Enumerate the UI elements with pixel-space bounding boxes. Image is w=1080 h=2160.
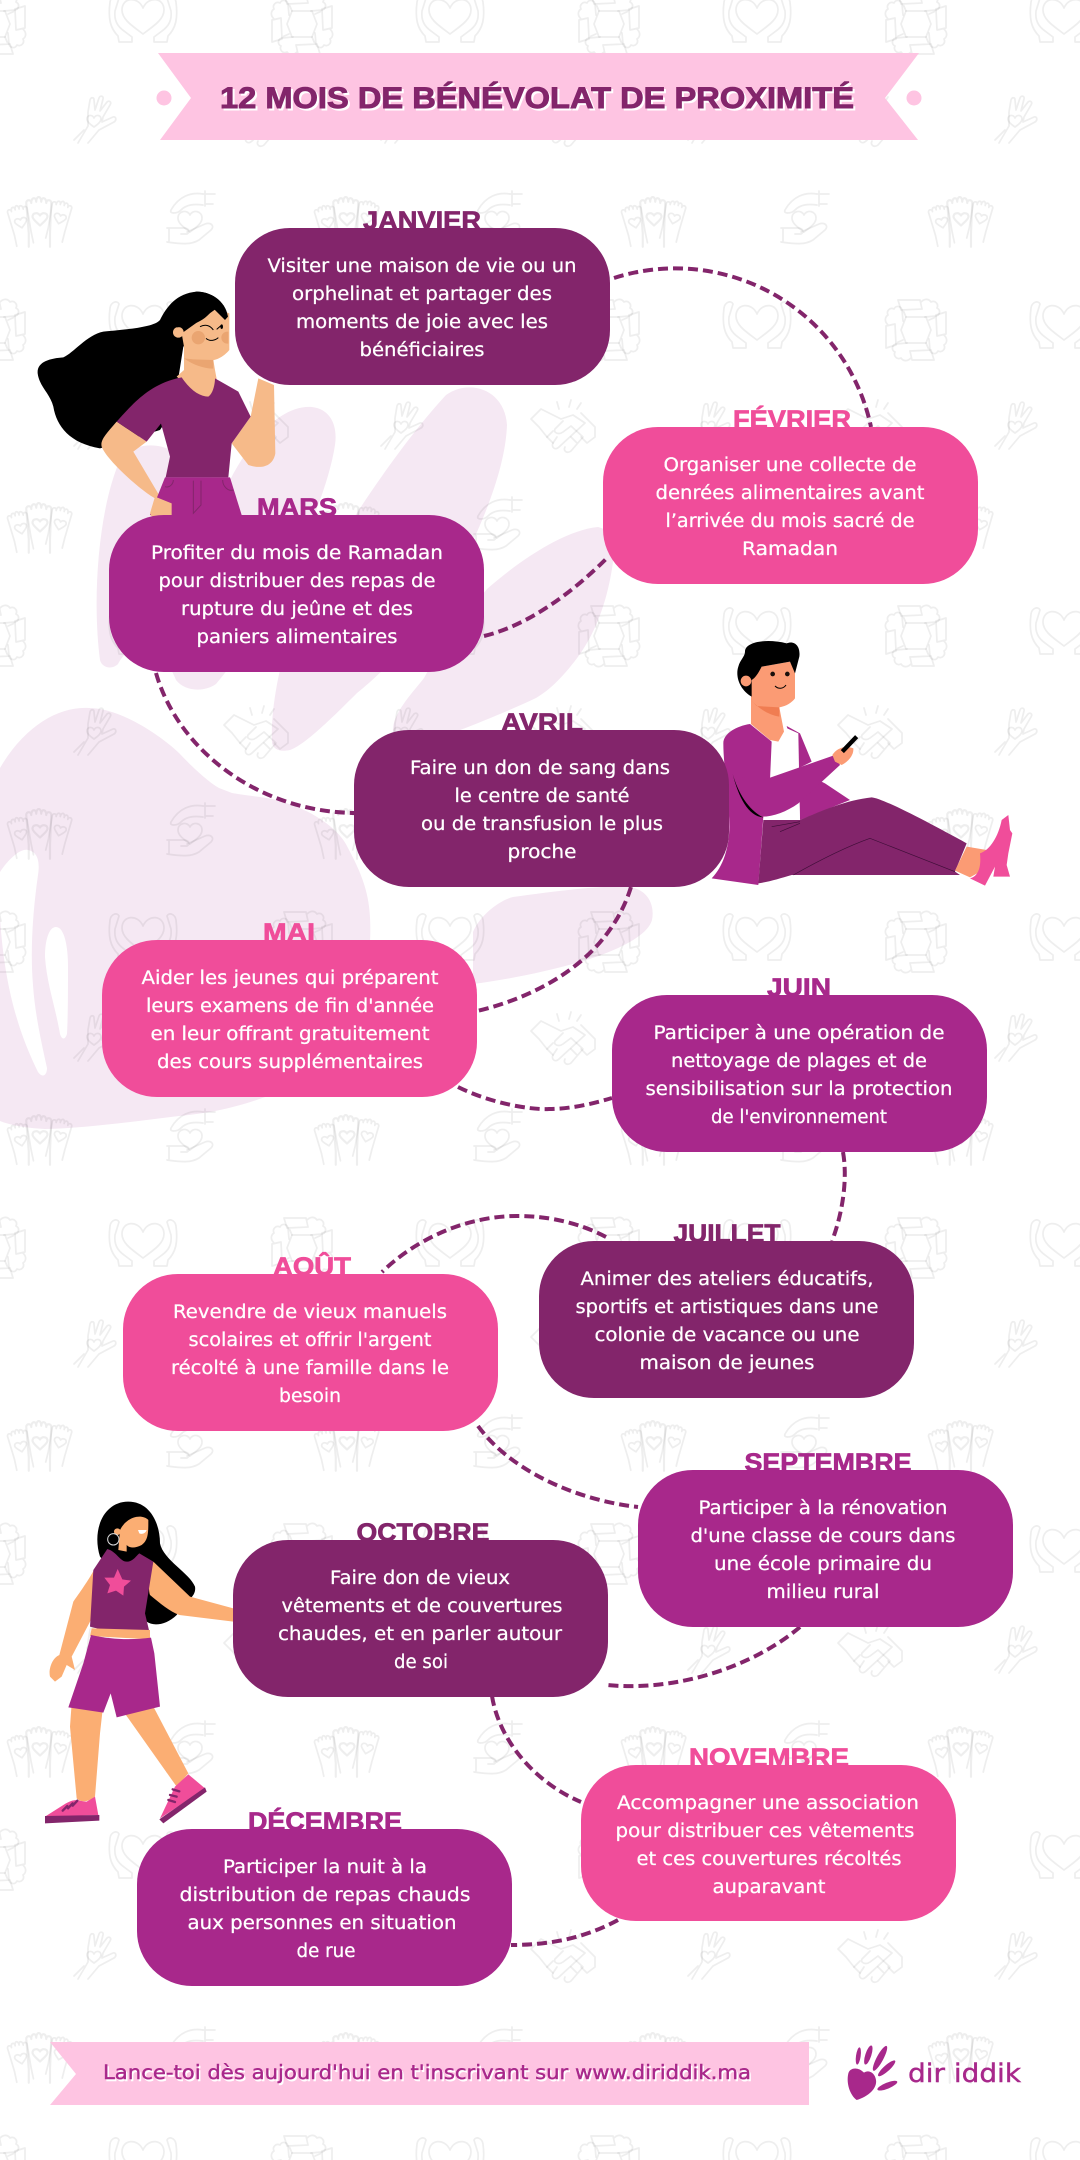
panel: novembre: auparavant	[712, 1877, 826, 1898]
figure: walking woman in shorts	[45, 1502, 233, 1823]
panel: septembre	[638, 1449, 1013, 1627]
connector: juin to juillet	[832, 1152, 845, 1241]
connector: janvier to février	[614, 268, 871, 427]
large pale hand shape	[0, 387, 653, 1129]
logo: dir iddik	[848, 2044, 1021, 2100]
panel: février: denrées alimentaires avant	[656, 483, 924, 504]
panel: mars: MARS	[257, 494, 337, 522]
connector: février to mars	[484, 558, 607, 636]
panel: février: FÉVRIER	[733, 405, 851, 434]
panel: janvier: bénéficiaires	[360, 340, 484, 361]
panel: janvier: Visiter une maison de vie ou un	[268, 256, 576, 277]
footer call-to-action banner: Lance-toi dès aujourd'hui en t'inscrivant sur www.diriddik.ma	[104, 2063, 752, 2086]
panel: mars	[109, 494, 484, 672]
panel: février: Ramadan	[742, 539, 838, 560]
panel: mai: Aider les jeunes qui préparent	[142, 968, 438, 989]
panel: juillet: sportifs et artistiques dans une	[576, 1297, 878, 1318]
panel: décembre: distribution de repas chauds	[180, 1885, 470, 1906]
panel: octobre: Faire don de vieux	[330, 1568, 510, 1589]
logo: dir iddik: dir iddik	[908, 2059, 1021, 2089]
figure: woman with long hair	[38, 292, 275, 525]
panel: juillet: JUILLET	[674, 1220, 780, 1248]
panel: janvier: moments de joie avec les	[296, 312, 548, 333]
panel: août: besoin	[279, 1386, 341, 1407]
panel: juin: sensibilisation sur la protection	[646, 1079, 952, 1100]
panel: juin: de l'environnement	[711, 1107, 887, 1128]
panel: septembre: une école primaire du	[714, 1554, 932, 1575]
panel: avril: AVRIL	[501, 709, 583, 737]
panel: février	[603, 405, 978, 584]
panel: août: AOÛT	[273, 1251, 351, 1281]
panel: novembre: et ces couvertures récoltés	[636, 1849, 902, 1870]
panel: janvier	[235, 207, 610, 385]
figure: seated man with phone	[712, 641, 1012, 886]
connector: mars to avril	[156, 673, 355, 813]
panel: septembre: d'une classe de cours dans	[690, 1526, 956, 1547]
panel: mars: paniers alimentaires	[196, 627, 398, 648]
panel: avril	[354, 709, 729, 887]
panel: juin: JUIN	[767, 974, 831, 1002]
panel: août	[123, 1251, 498, 1431]
panel: septembre: milieu rural	[766, 1582, 880, 1603]
panel: décembre: Participer la nuit à la	[223, 1857, 427, 1878]
panel: janvier: orphelinat et partager des	[292, 284, 552, 305]
footer call-to-action banner	[50, 2042, 809, 2105]
connector: mai to juin	[458, 1087, 612, 1109]
panel: juillet: Animer des ateliers éducatifs,	[580, 1269, 874, 1290]
panel: novembre: pour distribuer ces vêtements	[616, 1821, 914, 1842]
panel: juillet	[539, 1220, 914, 1398]
panel: avril: le centre de santé	[454, 786, 630, 807]
panel: décembre: DÉCEMBRE	[248, 1807, 402, 1836]
connector: juillet to août	[382, 1216, 606, 1272]
panel: mai: leurs examens de fin d'année	[146, 996, 434, 1017]
panel: juillet: colonie de vacance ou une	[594, 1325, 860, 1346]
connector: août to septembre	[478, 1426, 638, 1507]
title banner	[156, 53, 922, 140]
panel: août: scolaires et offrir l'argent	[188, 1330, 432, 1351]
panel: mai: des cours supplémentaires	[157, 1052, 423, 1073]
panel: octobre: de soi	[394, 1652, 448, 1673]
panel: décembre	[137, 1807, 512, 1986]
panel: octobre: OCTOBRE	[356, 1519, 490, 1547]
panel: mai: MAI	[263, 919, 315, 947]
panel: septembre: Participer à la rénovation	[698, 1498, 948, 1519]
panel: juin: nettoyage de plages et de	[671, 1051, 927, 1072]
panel: mars: pour distribuer des repas de	[158, 571, 436, 592]
panel: novembre: NOVEMBRE	[689, 1744, 849, 1772]
panel: mars: rupture du jeûne et des	[181, 599, 413, 620]
panel: mai: en leur offrant gratuitement	[150, 1024, 430, 1045]
panel: octobre	[233, 1519, 608, 1697]
panel: juin	[612, 974, 987, 1152]
panel: décembre: de rue	[296, 1941, 356, 1962]
panel: janvier: JANVIER	[363, 207, 481, 235]
panel: février: Organiser une collecte de	[664, 455, 916, 476]
panel: août: récolté à une famille dans le	[171, 1358, 449, 1379]
panel: mai	[102, 919, 477, 1097]
panel: mars: Profiter du mois de Ramadan	[151, 543, 443, 564]
panel: décembre: aux personnes en situation	[188, 1913, 456, 1934]
panel: juillet: maison de jeunes	[640, 1353, 814, 1374]
panel: octobre: chaudes, et en parler autour	[278, 1624, 562, 1645]
panel: octobre: vêtements et de couvertures	[282, 1596, 562, 1617]
connector: novembre to décembre	[511, 1920, 618, 1945]
panel: novembre: Accompagner une association	[617, 1793, 919, 1814]
panel: août: Revendre de vieux manuels	[173, 1302, 447, 1323]
title banner: 12 MOIS DE BÉNÉVOLAT DE PROXIMITÉ	[222, 83, 856, 117]
panel: novembre	[581, 1744, 956, 1921]
panel: avril: ou de transfusion le plus	[421, 814, 663, 835]
connector: septembre to octobre	[607, 1627, 800, 1686]
connector: avril to mai	[477, 887, 631, 1011]
panel: avril: Faire un don de sang dans	[410, 758, 670, 779]
title banner: 12 MOIS DE BÉNÉVOLAT DE PROXIMITÉ	[220, 81, 854, 115]
panel: juin: Participer à une opération de	[654, 1023, 944, 1044]
connector: octobre to novembre	[492, 1696, 581, 1802]
panel: avril: proche	[508, 842, 576, 863]
panel: septembre: SEPTEMBRE	[744, 1449, 912, 1477]
panel: février: l’arrivée du mois sacré de	[666, 511, 914, 532]
footer call-to-action banner: Lance-toi dès aujourd'hui en t'inscrivant sur www.diriddik.ma	[103, 2061, 751, 2084]
